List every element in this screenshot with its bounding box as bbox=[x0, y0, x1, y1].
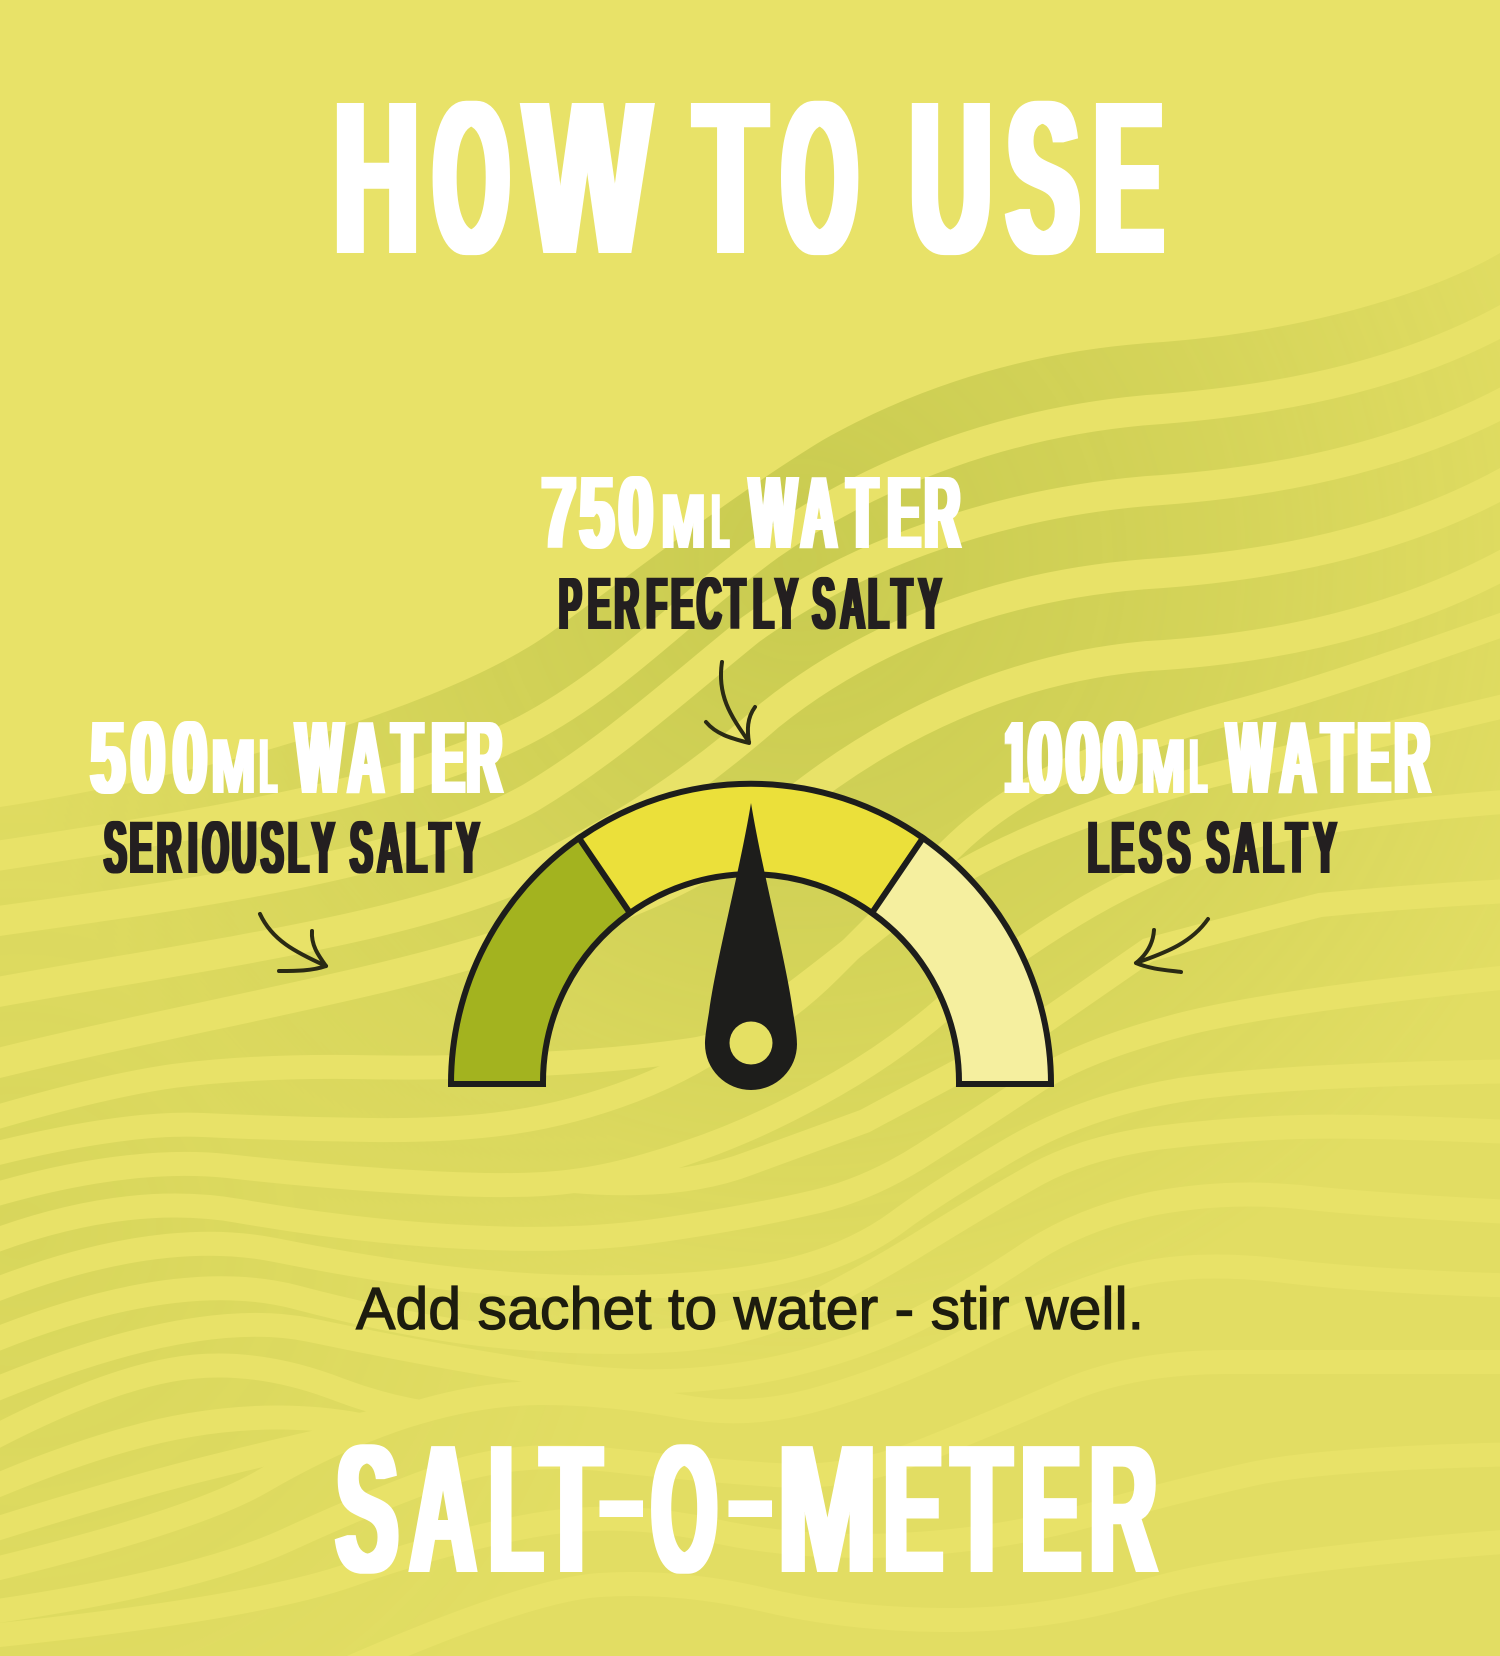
title: salt-o-meter: O bbox=[652, 1408, 717, 1612]
label: 750ml water: 750 bbox=[542, 455, 653, 570]
title: salt-o-meter: - bbox=[598, 1418, 645, 1575]
title: how to use: U bbox=[910, 56, 992, 299]
title: salt-o-meter: M bbox=[778, 1406, 877, 1611]
title: salt-o-meter: E bbox=[1021, 1407, 1081, 1611]
instruction text: Add sachet to water - stir well. bbox=[356, 1276, 1144, 1342]
label: perfectly salty: PERFECTLY SALTY bbox=[559, 563, 941, 646]
gauge segment: perfectly salty bbox=[579, 784, 923, 913]
gauge segment: seriously salty bbox=[451, 838, 630, 1084]
title: how to use: T bbox=[695, 56, 767, 300]
title: salt-o-meter: E bbox=[884, 1408, 943, 1612]
label: 1000ml water: WATER bbox=[1227, 701, 1430, 816]
title: salt-o-meter: T bbox=[541, 1408, 601, 1612]
title: how to use: H bbox=[334, 56, 419, 300]
title: salt-o-meter: R bbox=[1090, 1407, 1157, 1611]
title: salt-o-meter bbox=[336, 1406, 1157, 1612]
title: how to use: S bbox=[1007, 56, 1079, 300]
title: how to use: O bbox=[782, 55, 857, 300]
title: how to use: E bbox=[1094, 58, 1163, 300]
label: 750ml water: WATER bbox=[750, 456, 960, 571]
label: 1000ml water: L bbox=[1190, 724, 1207, 810]
gauge segment: less salty bbox=[872, 838, 1051, 1084]
arrow: to 750ml bbox=[706, 662, 755, 743]
arrow: to 1000ml bbox=[1136, 919, 1208, 972]
title: salt-o-meter: S bbox=[336, 1407, 398, 1611]
label: 1000ml water: 1 bbox=[1005, 699, 1027, 815]
title: salt-o-meter: T bbox=[952, 1407, 1011, 1612]
title: salt-o-meter: - bbox=[727, 1418, 774, 1575]
label: 1000ml water: M bbox=[1141, 724, 1185, 811]
label: 750ml water bbox=[542, 455, 960, 571]
label: 1000ml water: 000 bbox=[1028, 700, 1137, 815]
label: 500ml water: L bbox=[260, 724, 277, 810]
label: 750ml water: M bbox=[661, 479, 705, 566]
gauge needle bbox=[705, 803, 797, 1090]
label: 500ml water: 500 bbox=[91, 700, 207, 815]
label: 500ml water: WATER bbox=[296, 701, 502, 816]
label: 750ml water: L bbox=[712, 479, 729, 565]
title: salt-o-meter: L bbox=[489, 1408, 543, 1612]
label: seriously salty: SERIOUSLY SALTY bbox=[104, 807, 479, 890]
label: less salty: LESS SALTY bbox=[1088, 807, 1336, 890]
label: 500ml water bbox=[91, 700, 502, 816]
title: salt-o-meter: A bbox=[410, 1406, 476, 1611]
title: how to use: W bbox=[525, 57, 651, 300]
arrow: to 500ml bbox=[260, 914, 326, 971]
title: how to use bbox=[334, 55, 1163, 300]
label: 1000ml water bbox=[1005, 699, 1430, 816]
gauge bbox=[451, 784, 1051, 1084]
title: how to use: O bbox=[434, 55, 509, 300]
label: 500ml water: M bbox=[211, 724, 255, 811]
